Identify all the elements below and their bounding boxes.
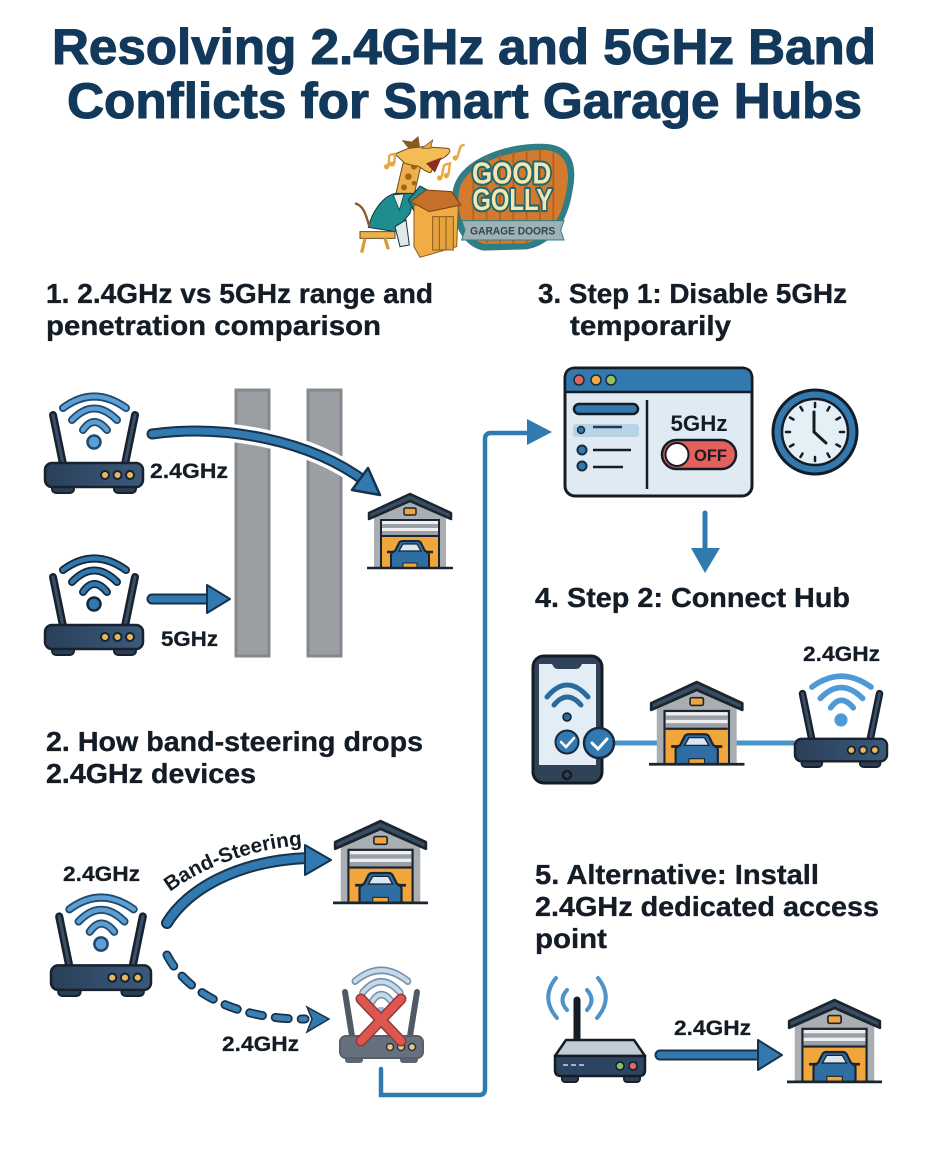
wall 1: [236, 390, 269, 656]
connector arrow to step 1: [381, 419, 552, 1095]
panel 3: disable 5GHz settings window: [565, 368, 752, 496]
icon: phone: [533, 656, 614, 783]
heading 2: [46, 726, 423, 789]
panel 1: range and penetration diagram: [45, 390, 453, 656]
icon: router: [51, 898, 151, 996]
toggle: off: OFF: [694, 446, 727, 465]
label: 2.4GHz: 2.4GHz: [63, 863, 140, 886]
arrow: step 1 to step 2: [691, 513, 720, 573]
arrow: 5GHz blocked: [152, 585, 230, 613]
heading 5: 2.4GHz dedicated access: [535, 891, 879, 922]
label: 2.4GHz dropped: 2.4GHz: [222, 1033, 299, 1056]
heading 5: point: [535, 923, 607, 954]
heading 2: 2. How band-steering drops: [46, 726, 423, 757]
icon: clock: [773, 390, 857, 474]
logo: Good Golly Garage Doors: [355, 136, 574, 257]
label: 2.4GHz: 2.4GHz: [150, 460, 228, 483]
icon: 5GHz router: [45, 558, 143, 655]
panel 5: dedicated access point diagram: [548, 978, 882, 1082]
icon: garage: [787, 1000, 882, 1082]
heading 3: [538, 278, 847, 341]
arrow: dropped 2.4GHz: [167, 955, 329, 1032]
heading 3: 3. Step 1: Disable 5GHz: [538, 278, 847, 309]
heading 1: penetration comparison: [46, 310, 381, 341]
label: 2.4GHz: 2.4GHz: [674, 1017, 751, 1040]
panel 4: connect hub diagram: [533, 643, 887, 783]
title: [52, 19, 876, 129]
icon: router: [795, 676, 887, 767]
logo giraffe: [355, 136, 465, 253]
arrow: access point to garage: [660, 1040, 782, 1070]
icon: access point: [548, 978, 645, 1082]
icon: garage: [649, 682, 744, 764]
arrow: band-steering: [167, 845, 331, 923]
heading 3: temporarily: [570, 310, 731, 341]
icon: garage: [367, 494, 453, 568]
logo badge: GOLLY: [472, 183, 552, 217]
label: Band-Steering: Band-Steering: [163, 834, 301, 892]
logo house: [411, 190, 461, 257]
heading 4: 4. Step 2: Connect Hub: [535, 582, 850, 613]
title: Resolving 2.4GHz and 5GHz Band: [52, 19, 876, 75]
toggle: off: [662, 440, 736, 469]
window title bar: [565, 368, 752, 392]
heading 5: [535, 859, 879, 954]
heading 1: 1. 2.4GHz vs 5GHz range and: [46, 278, 433, 309]
icon: failed router: [340, 970, 423, 1063]
title: Conflicts for Smart Garage Hubs: [67, 73, 862, 129]
wall 2: [308, 390, 341, 656]
logo badge: GOOD: [472, 156, 551, 190]
heading 5: 5. Alternative: Install: [535, 859, 819, 890]
label: 2.4GHz: 2.4GHz: [803, 643, 880, 666]
icon: garage: [333, 821, 428, 903]
icon: 2.4GHz router: [45, 396, 143, 493]
connection line: [605, 740, 800, 746]
sidebar menu: [573, 404, 639, 470]
label: 5GHz: 5GHz: [161, 628, 218, 651]
logo badge: [452, 144, 574, 251]
panel 2: band-steering diagram: [50, 820, 428, 1063]
heading 2: 2.4GHz devices: [46, 758, 256, 789]
heading 1: [46, 278, 433, 341]
arrow: 2.4GHz passes walls: [152, 431, 380, 495]
label: 5GHz: 5GHz: [670, 411, 728, 436]
logo badge: GARAGE DOORS: [470, 225, 555, 237]
